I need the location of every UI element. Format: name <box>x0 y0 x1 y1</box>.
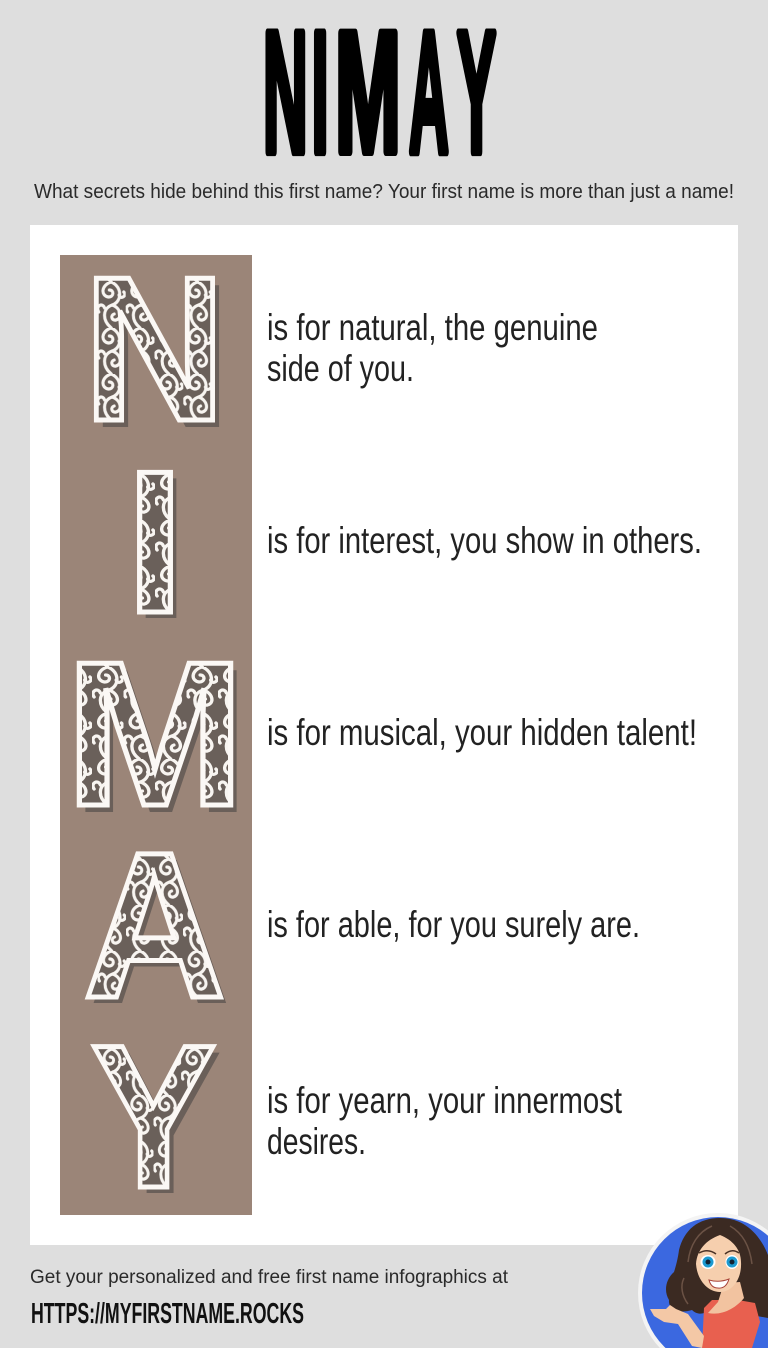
text: Y meaning <box>267 1080 623 1162</box>
letter M: M <box>65 619 245 849</box>
subtitle: What secrets hide behind this first name? Your first name is more than just a name! <box>34 181 734 203</box>
letter N: N <box>83 233 226 464</box>
letter I: I <box>125 430 185 656</box>
text: A meaning: is for able, for you surely are. <box>267 904 640 945</box>
icon: avatar <box>638 1213 768 1348</box>
title: I <box>312 0 329 189</box>
text: Y meaning: desires. <box>267 1121 366 1162</box>
letter N: N <box>90 240 232 471</box>
letter A: A <box>89 814 231 1047</box>
letter A: A <box>83 808 226 1041</box>
letter M: M <box>71 626 251 856</box>
panel: brown letter column <box>60 233 252 1237</box>
title <box>263 0 496 189</box>
footer line: Get your personalized and free first name infographics at <box>30 1267 509 1288</box>
title: Y <box>457 0 496 189</box>
text: N meaning: side of you. <box>267 348 414 389</box>
text: Y meaning: is for yearn, your innermost <box>267 1080 623 1121</box>
footer url: HTTPS://MYFIRSTNAME.ROCKS <box>31 1298 304 1330</box>
letter I: I <box>131 436 191 662</box>
text: N meaning <box>267 307 598 389</box>
title: N <box>263 0 308 189</box>
panel: white card <box>30 225 738 1245</box>
letter Y: Y <box>91 1003 216 1231</box>
title: M <box>335 0 401 189</box>
title: A <box>409 0 449 189</box>
letter Y: Y <box>97 1009 223 1237</box>
text: N meaning: is for natural, the genuine <box>267 307 598 348</box>
